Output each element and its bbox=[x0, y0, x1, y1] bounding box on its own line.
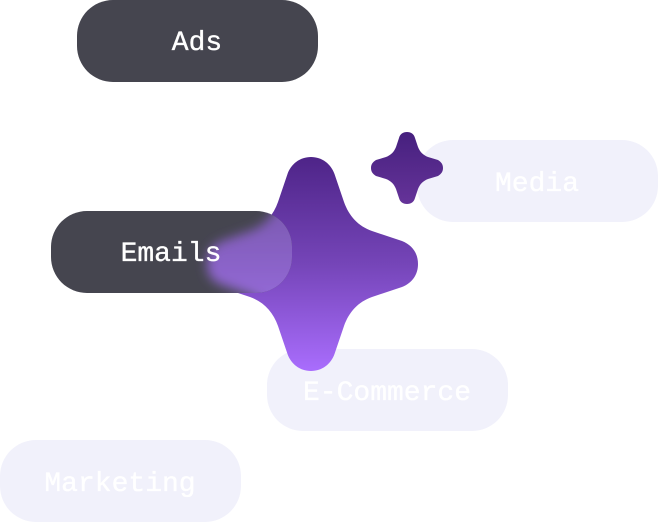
pill: E-Commerce (faded): E-Commerce bbox=[303, 378, 471, 409]
pill: Media (faded): Media bbox=[495, 169, 579, 200]
pill: Emails (frosted glass over star): Emails bbox=[121, 239, 221, 270]
pill: E-Commerce (faded) bbox=[267, 349, 508, 431]
pill: Emails (frosted glass over star) bbox=[51, 211, 292, 293]
pill: Ads bbox=[77, 0, 318, 82]
icon: large four-point star bbox=[204, 157, 418, 371]
pill: Marketing (faded) bbox=[0, 440, 241, 522]
icon: small four-point star bbox=[371, 132, 443, 204]
pill: Marketing (faded): Marketing bbox=[44, 469, 196, 500]
pill: Media (faded) bbox=[417, 140, 658, 222]
pill: Ads: Ads bbox=[172, 28, 222, 59]
